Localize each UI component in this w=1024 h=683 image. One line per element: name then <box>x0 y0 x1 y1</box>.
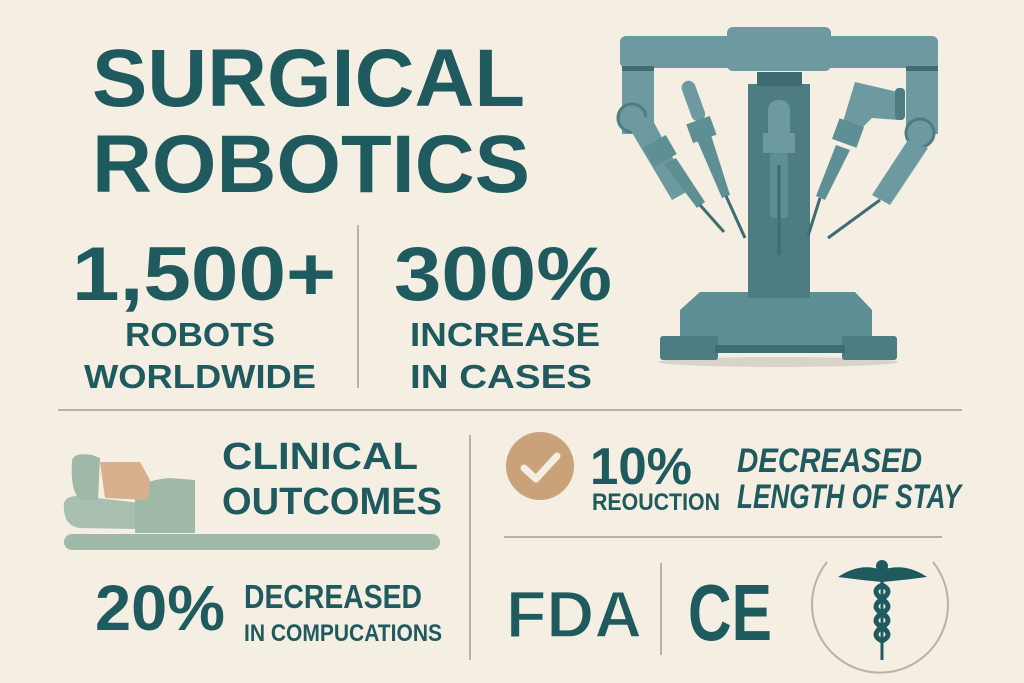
stat: increase in cases: IN CASES <box>410 358 592 395</box>
logo: caduceus <box>812 560 948 673</box>
stat: length of stay: LENGTH OF STAY <box>737 478 964 516</box>
stat: decreased complications: IN COMPUCATIONS <box>244 620 442 647</box>
heading: clinical outcomes: OUTCOMES <box>222 481 442 523</box>
stat: increase in cases: INCREASE <box>410 316 600 353</box>
stat: length of stay: 10% <box>590 438 692 496</box>
logo: CE: CE <box>688 568 772 657</box>
icon: check circle <box>506 432 574 500</box>
stat: decreased complications: DECREASED <box>244 578 422 615</box>
stat: robots worldwide: 1,500+ <box>72 232 336 317</box>
stat: increase in cases: 300% <box>394 232 612 317</box>
stat: robots worldwide <box>72 232 336 395</box>
heading: clinical outcomes: CLINICAL <box>222 436 418 478</box>
stat: decreased complications: 20% <box>95 572 225 644</box>
stat: increase in cases <box>394 232 612 395</box>
stat: length of stay <box>590 438 964 516</box>
stat: decreased complications <box>95 572 442 647</box>
stat: length of stay: DECREASED <box>737 442 922 480</box>
title: SURGICAL <box>92 33 525 124</box>
title: ROBOTICS <box>92 119 530 210</box>
icon: patient in bed <box>64 454 440 550</box>
title <box>92 33 530 210</box>
stat: length of stay: REOUCTION <box>592 489 720 516</box>
logo: FDA: FDA <box>506 577 642 651</box>
stat: robots worldwide: WORLDWIDE <box>84 358 316 395</box>
heading: clinical outcomes <box>222 436 442 523</box>
illustration: surgical robot <box>618 27 938 367</box>
stat: robots worldwide: ROBOTS <box>125 316 275 353</box>
